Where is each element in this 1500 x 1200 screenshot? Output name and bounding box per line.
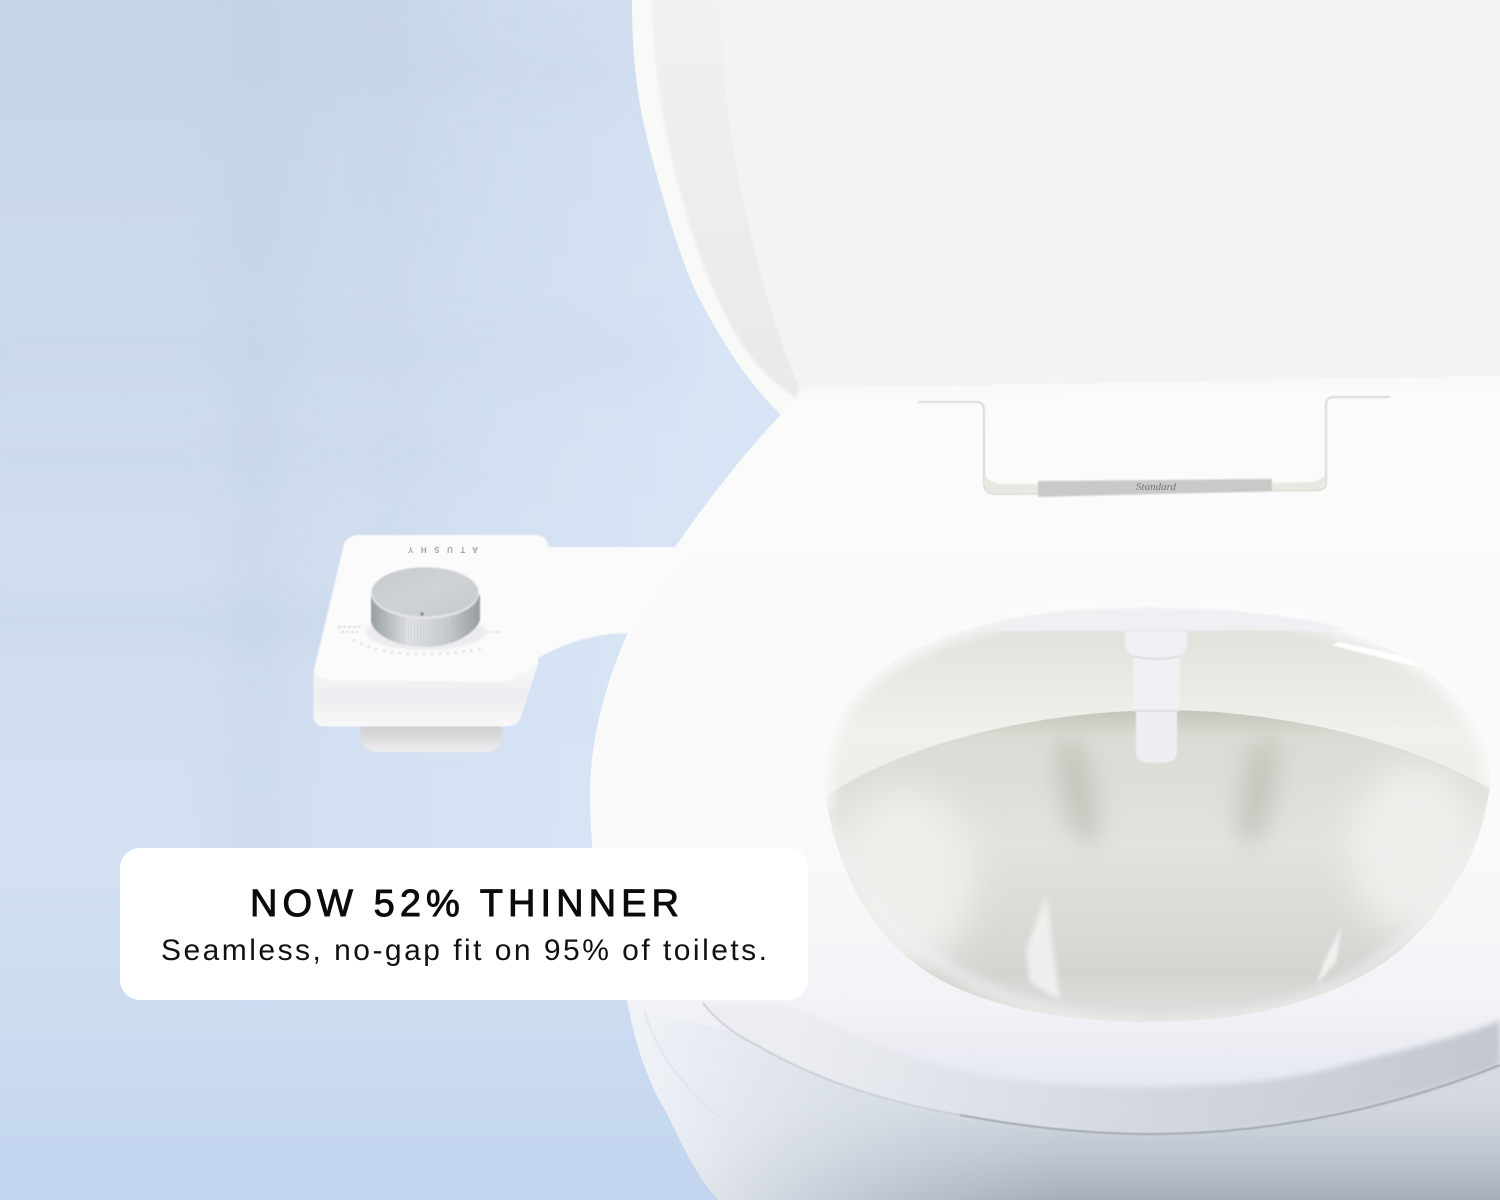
bidet attachment with control dial: [314, 535, 692, 752]
seat rim band: [703, 1003, 1500, 1134]
hinge cut-out with brand plate: [918, 397, 1390, 497]
toilet bowl opening: [825, 605, 1495, 1040]
toilet seat with rim: [590, 392, 1500, 1134]
callout card: [120, 848, 808, 1000]
subheading: Seamless, no-gap fit on 95% of toilets.: [161, 934, 767, 967]
soft blended opening edge: [825, 606, 1150, 810]
under-body: [360, 725, 502, 752]
bidet underside bar: [977, 609, 1350, 631]
dial: [366, 567, 486, 650]
toilet lid, raised: [632, 0, 1500, 416]
dial scale ticks: [338, 627, 502, 654]
toilet lower bowl: [627, 1000, 1500, 1200]
brand text, mirrored: ATUSHY: [407, 545, 478, 554]
heading: NOW 52% THINNER: [250, 883, 679, 925]
water and inner bowl: [825, 710, 1495, 1040]
hinge cut-out with brand plate: Standard: [1136, 481, 1176, 493]
bidet nozzle: [1125, 631, 1187, 763]
control body: [314, 535, 548, 726]
arm connecting to seat: [538, 547, 692, 658]
